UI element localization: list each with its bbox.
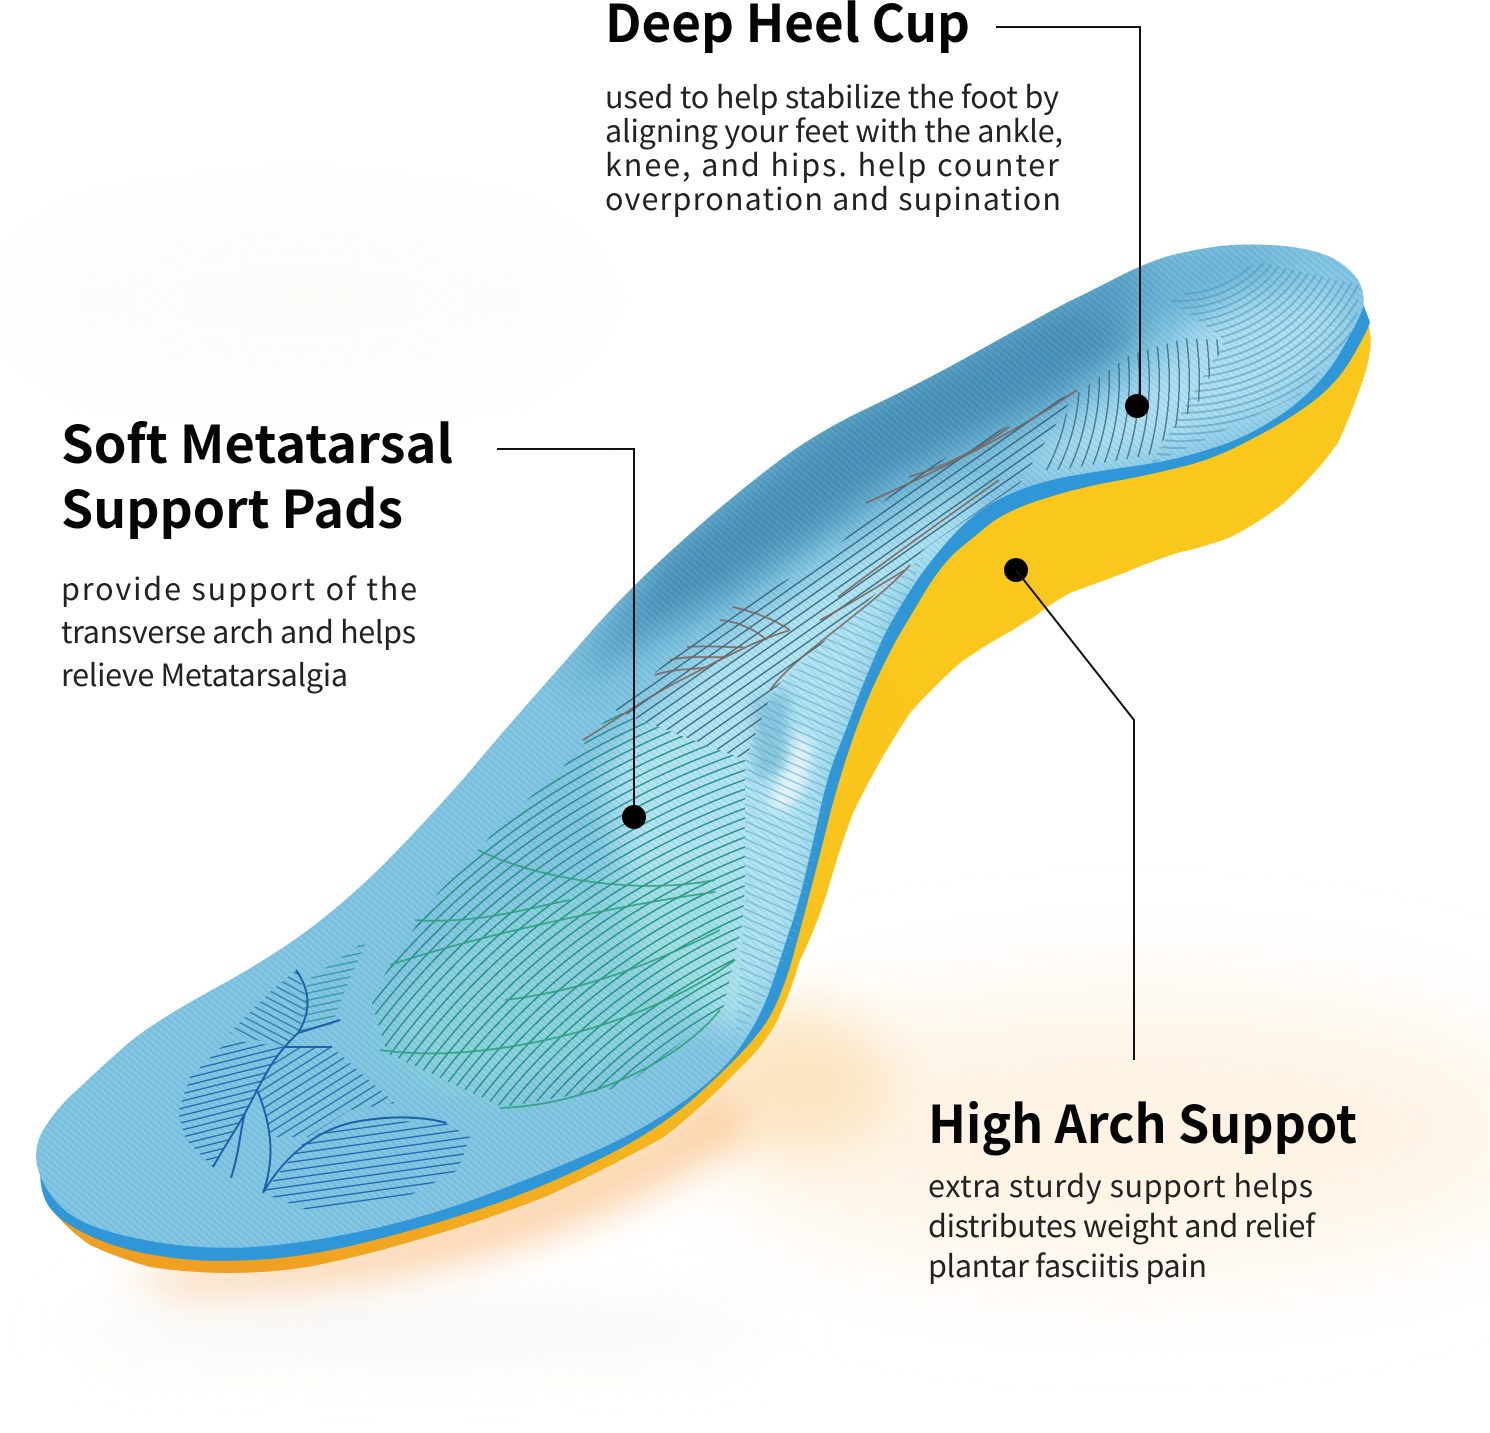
body text: provide support of the: [61, 565, 417, 609]
icon: midfoot leaf pattern: [365, 700, 750, 1110]
icon: arch feather pattern: [582, 389, 1078, 758]
marker dot: [1004, 558, 1028, 582]
body text: overpronation and supination: [605, 175, 1061, 219]
heading: Support Pads: [61, 468, 403, 543]
surface shading and texture: [36, 244, 1364, 1248]
body text: knee, and hips. help counter: [605, 141, 1059, 185]
heading: High Arch Suppot: [928, 1083, 1357, 1158]
callout: Deep Heel Cup: [605, 0, 1149, 418]
leader line: [996, 27, 1140, 406]
yellow foam base: [52, 318, 1371, 1273]
warm floor glow: [0, 230, 1490, 1352]
icon: toe leaf pattern: [178, 944, 470, 1210]
body text: distributes weight and relief: [928, 1202, 1316, 1246]
heading: Soft Metatarsal: [61, 403, 453, 478]
icon: glare highlight: [767, 730, 812, 813]
marker dot: [1125, 394, 1149, 418]
icon: heel fan and ridges: [730, 240, 1365, 1050]
callout: High Arch Suppot: [928, 558, 1357, 1286]
marker dot: [622, 805, 646, 829]
body text: plantar fasciitis pain: [928, 1242, 1207, 1286]
body text: transverse arch and helps: [61, 608, 416, 652]
blue rim: [40, 296, 1370, 1261]
insole: [36, 244, 1371, 1273]
leader line: [497, 449, 634, 817]
body text: [928, 1162, 1316, 1286]
body text: aligning your feet with the ankle,: [605, 107, 1063, 151]
body text: [605, 73, 1063, 219]
body text: relieve Metatarsalgia: [61, 651, 348, 695]
blue top surface: [36, 244, 1364, 1248]
body text: extra sturdy support helps: [928, 1162, 1313, 1206]
leader line: [1016, 570, 1134, 1060]
body text: used to help stabilize the foot by: [605, 73, 1059, 117]
callout: Soft Metatarsal Support Pads: [61, 403, 646, 829]
heading: [61, 403, 453, 543]
body text: [61, 565, 417, 695]
